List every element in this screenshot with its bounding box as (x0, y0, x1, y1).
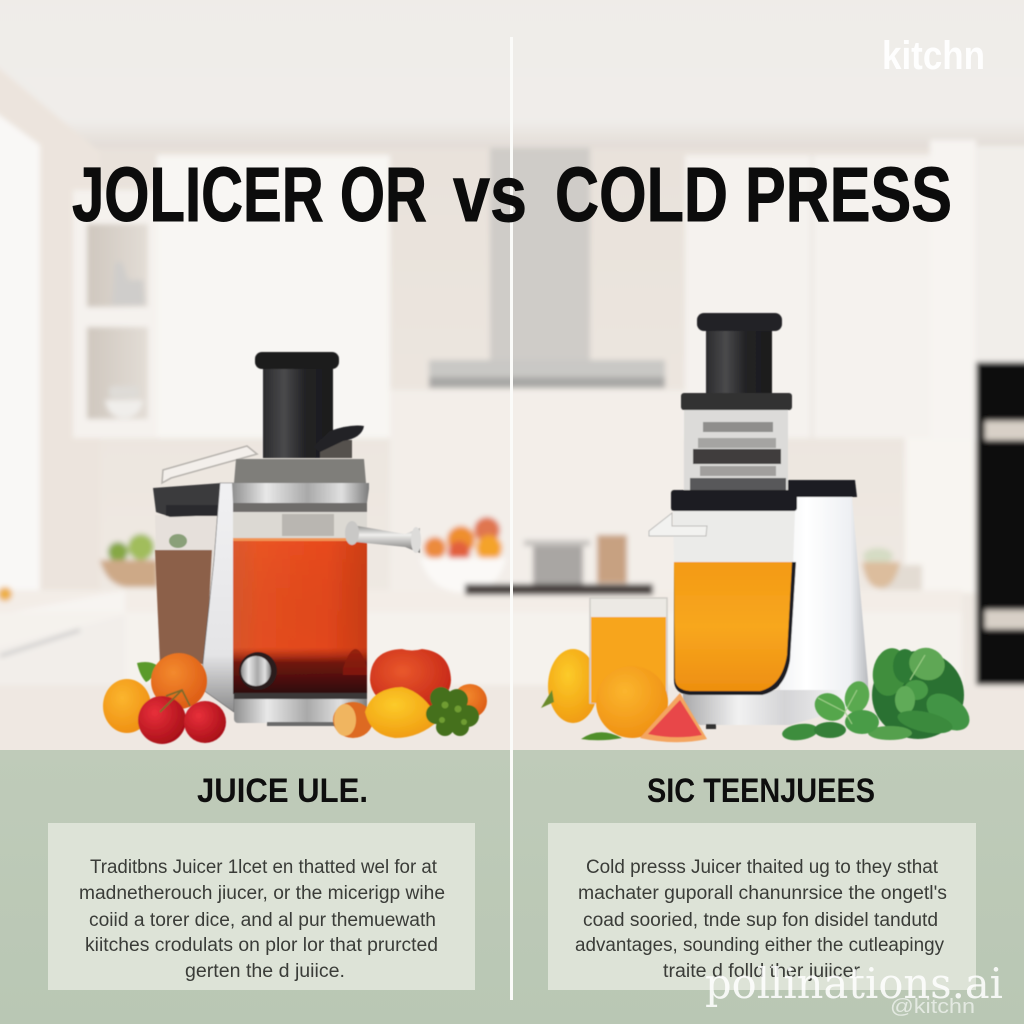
watermark: pollinations.ai (705, 959, 1003, 1008)
left heading: JUICE ULE. (197, 772, 368, 810)
range hood (429, 148, 665, 388)
shelf unit left (73, 190, 157, 438)
far right column (905, 438, 975, 593)
clear upper jar (233, 503, 367, 541)
clear auger chamber (684, 408, 788, 491)
lemon (365, 687, 439, 738)
left body text: coiid a torer dice, and al pur themuewath (89, 910, 436, 931)
left text panel (48, 823, 475, 990)
chute cap (697, 313, 782, 331)
right body text (575, 857, 947, 982)
window (0, 112, 40, 595)
bottom green panel (0, 750, 1024, 1024)
orange (596, 666, 668, 738)
tangerine (151, 653, 207, 709)
right heading: SIC TEENJUEES (647, 772, 875, 810)
flip spout lid (313, 426, 364, 458)
lower cabinets (0, 612, 962, 690)
ceiling (0, 0, 1024, 148)
clear jar spout (649, 513, 707, 536)
silver base (234, 693, 367, 726)
upper cabinets left (157, 155, 390, 438)
orange (103, 679, 151, 733)
handle: @kitchn (890, 996, 975, 1018)
right body text: advantages, sounding either the cutleapingy (575, 935, 944, 956)
silver ring (232, 483, 369, 503)
left juicer (153, 352, 421, 726)
right fruit bowl background (420, 517, 506, 593)
juice glass (590, 598, 667, 703)
black oven (976, 362, 1024, 685)
right body text: machater guporall chanunrsice the ongetl's (578, 883, 947, 904)
stove and pots (465, 535, 653, 595)
silver juice spout (345, 521, 421, 553)
side wall left (0, 65, 100, 600)
cut fruit (333, 702, 373, 738)
orange juice (674, 562, 796, 695)
center divider line (510, 37, 513, 1000)
right fruit group (541, 598, 976, 742)
right bowl background (862, 548, 922, 590)
left body text: Traditbns Juicer 1lcet en thatted wel for at (90, 857, 438, 878)
left fruit group (103, 649, 487, 744)
small orange at left edge (0, 587, 12, 601)
right juicer (649, 313, 868, 729)
right body text: traite d folld ther juiicer (663, 961, 861, 982)
title vs: vs (453, 149, 527, 238)
red juice (233, 538, 367, 694)
stem (160, 690, 190, 712)
pulp container with brown juice (153, 483, 222, 664)
logo: kitchn (882, 34, 985, 78)
left body text: gerten the d juiice. (185, 961, 345, 982)
kitchen background photo (0, 0, 1024, 760)
red apple (370, 649, 451, 712)
orange behind (453, 684, 487, 718)
clear jar (673, 511, 795, 565)
right body text: coad sooried, tnde sup fon disidel tandutd (583, 910, 938, 931)
table top (0, 685, 1024, 760)
silver knob (239, 652, 277, 690)
leaf (137, 662, 158, 682)
clear pusher handle (162, 446, 257, 483)
leaf (581, 732, 622, 740)
dark ring (681, 393, 792, 410)
silver side panel (202, 483, 234, 712)
silver base (683, 690, 868, 729)
black tower top (788, 480, 857, 497)
counter (0, 590, 962, 614)
tomato (138, 696, 186, 744)
left body text: kiitches crodulats on plor lor that prurcted (85, 935, 438, 956)
upper cabinets right (685, 155, 931, 438)
left fruit bowl (100, 534, 158, 587)
grapefruit wedge (640, 693, 707, 742)
feed chute (706, 328, 772, 394)
feed chute (255, 352, 339, 458)
clear top bowl (234, 459, 366, 483)
title left: JOLICER OR (72, 152, 427, 238)
lemon (541, 649, 598, 723)
cabinet handle (0, 630, 80, 656)
mint leaves (781, 643, 976, 742)
lighter wall centre (390, 390, 685, 590)
tomato (184, 701, 226, 743)
white motor tower (780, 497, 868, 722)
left body text: madnetherouch jiucer, or the micerigp wihe (79, 883, 445, 904)
dark collar (671, 490, 797, 511)
right body text: Cold presss Juicer thaited ug to they sthat (586, 857, 939, 878)
parsley (426, 687, 479, 736)
right text panel (548, 823, 976, 990)
left body text (79, 857, 445, 982)
